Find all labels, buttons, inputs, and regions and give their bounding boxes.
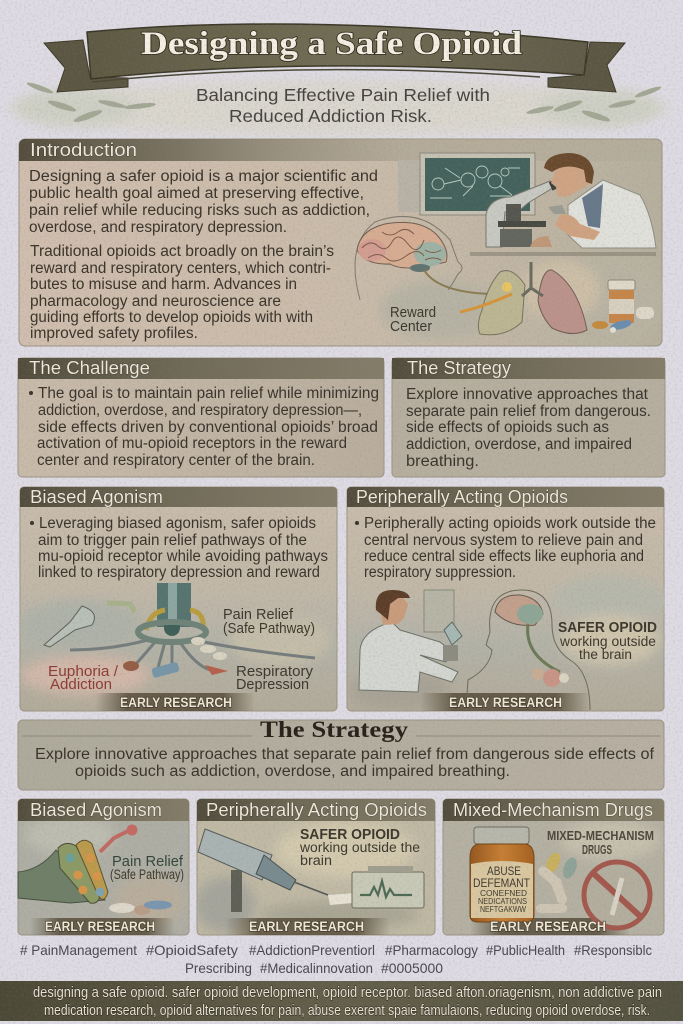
title: Designing a Safe Opioid (141, 26, 522, 62)
panel: the strategy wide (18, 717, 664, 790)
illustration: pill bottle with label: CONEFNED (480, 888, 527, 898)
icon: brain (355, 216, 510, 300)
heading: The Strategy (260, 717, 409, 742)
hashtags: #Responsiblc (574, 942, 652, 958)
illustration: hand holding capsules (18, 824, 172, 915)
hashtags: #PublicHealth (486, 942, 565, 958)
text: intro paragraph one (29, 168, 378, 236)
text: peripheral bullet (355, 515, 656, 581)
text: challenge bullet: side effects driven by conventional opioids’ broad (38, 419, 378, 436)
illustration: syringe (198, 829, 355, 912)
label: reward center: Center (390, 319, 432, 335)
label: safer opioid: brain (300, 853, 332, 868)
illustration: pill bottle with label: NEDICATIONS (478, 896, 527, 906)
subtitle: Balancing Effective Pain Relief with (196, 85, 490, 105)
hashtags: #0005000 (381, 960, 443, 976)
text: biased agonism bullet: aim to trigger pain relief pathways of the (38, 532, 307, 549)
badge: early research: EARLY RESEARCH (249, 919, 364, 934)
hashtags: #OpioidSafety (146, 942, 238, 958)
label: safer opioid: working outside (559, 634, 656, 649)
heading: Biased Agonism (30, 800, 162, 820)
text: intro paragraph one: Designing a safer opioid is a major scientific and (29, 168, 378, 185)
card: peripherally acting opioids (195, 799, 435, 935)
text: biased agonism bullet (30, 515, 328, 581)
text: strategy body: separate pain relief from dangerous. (406, 403, 651, 420)
label: respiratory depression: Respiratory (236, 664, 314, 680)
text: strategy summary: opioids such as addiction, overdose, and impaired breathing. (75, 763, 510, 780)
text: challenge bullet (29, 385, 379, 469)
text: intro paragraph two: Traditional opioids act broadly on the brain’s (30, 243, 334, 260)
text: challenge bullet: activation of mu-opioid receptors in the reward (37, 435, 347, 452)
illustration: pill bottle with label: DEFEMANT (473, 876, 531, 890)
text: strategy body: Explore innovative approaches that (406, 386, 649, 403)
illustration: receptor with pathways (44, 583, 315, 678)
panel: peripherally acting opioids (347, 487, 670, 711)
label: respiratory depression: Depression (236, 677, 309, 693)
panel: introduction (19, 139, 665, 350)
hashtags: # PainManagement (20, 942, 137, 958)
illustration: pill bottle with label: NEFTGAKWW (480, 904, 526, 914)
text: biased agonism bullet: mu-opioid receptor while avoiding pathways (38, 548, 328, 565)
illustration: monitor (352, 866, 424, 908)
text: strategy body: breathing. (406, 453, 479, 470)
label: safer opioid: the brain (579, 647, 632, 662)
label: reward center: Reward (390, 305, 436, 321)
hashtags: #Pharmacology (385, 942, 478, 958)
hashtags (20, 942, 652, 976)
heading: Mixed-Mechanism Drugs (453, 800, 653, 820)
card: mixed-mechanism drugs (443, 799, 664, 935)
text: intro paragraph two: pharmacology and neuroscience are (30, 293, 281, 310)
subtitle: Reduced Addiction Risk. (229, 106, 432, 126)
hashtags: Prescribing (185, 960, 252, 976)
label: pain relief: (Safe Pathway) (223, 621, 315, 637)
heading: introduction: Introduction (30, 140, 137, 160)
text: biased agonism bullet: linked to respiratory depression and reward (38, 564, 320, 581)
label: mixed mechanism drugs: MIXED-MECHANISM (547, 828, 654, 843)
subtitle (196, 85, 490, 126)
text: strategy body (406, 386, 651, 470)
title banner (44, 24, 625, 92)
text: peripheral bullet: respiratory suppression. (364, 564, 516, 581)
icon: chalkboard with molecule (398, 153, 535, 215)
card: biased agonism (18, 799, 189, 935)
text: peripheral bullet: central nervous system to relieve pain and (364, 532, 643, 549)
label: reward center (390, 305, 436, 335)
label: euphoria / addiction: Addiction (50, 677, 112, 693)
keyword footer (0, 981, 683, 1021)
panel: the challenge (18, 358, 384, 477)
illustration: capsules (536, 850, 579, 913)
icon: lungs (460, 262, 587, 335)
label: pain relief: Pain Relief (112, 854, 184, 870)
label: pain relief: Pain Relief (223, 607, 294, 623)
text: peripheral bullet: Peripherally acting opioids work outside the (364, 515, 656, 532)
label: pain relief (110, 854, 184, 882)
text: challenge bullet: center and respiratory center of the brain. (37, 452, 315, 469)
text: intro paragraph two: butes to misuse and harm. Advances in (30, 276, 297, 293)
badge: early research: EARLY RESEARCH (449, 695, 562, 710)
illustration: researcher with silhouette and brain (359, 590, 590, 710)
text: biased agonism bullet: Leveraging biased agonism, safer opioids (39, 515, 316, 532)
label: safer opioid (299, 827, 420, 868)
badge: early research: EARLY RESEARCH (45, 919, 155, 934)
text: intro paragraph two: reward and respiratory centers, which contri- (30, 260, 331, 277)
foliage backdrop behind the banner (10, 80, 670, 136)
text: challenge bullet: The goal is to maintain pain relief while minimizing (38, 385, 379, 402)
text: strategy summary (35, 746, 655, 780)
label: euphoria / addiction: Euphoria / (48, 664, 119, 680)
text: intro paragraph one: public health goal aimed at preserving effective, (29, 185, 364, 202)
label: safer opioid (558, 620, 657, 662)
label: pain relief: (Safe Pathway) (110, 867, 184, 882)
text: challenge bullet: addiction, overdose, and respiratory depression—, (38, 402, 362, 419)
label: safer opioid: SAFER OPIOID (300, 827, 400, 843)
label: mixed mechanism drugs: DRUGS (582, 842, 612, 857)
label: respiratory depression (236, 664, 314, 693)
illustration: pill bottle with label (470, 827, 534, 922)
heading: Biased Agonism (30, 487, 163, 507)
label: safer opioid: SAFER OPIOID (558, 620, 657, 636)
tabletop ledge (470, 252, 656, 256)
label: safer opioid: working outside the (299, 840, 420, 855)
heading: The Strategy (407, 358, 511, 378)
text: strategy body: side effects of opioids such as (406, 419, 609, 436)
heading: Peripherally Acting Opioids (356, 487, 568, 507)
icon: prohibition sign (584, 862, 650, 928)
label: mixed mechanism drugs (547, 828, 654, 857)
panel: biased agonism (20, 487, 337, 711)
text: intro paragraph two: improved safety profiles. (30, 325, 198, 342)
illustration: pill bottle with label: ABUSE (487, 864, 521, 878)
badge: early research: EARLY RESEARCH (120, 695, 232, 710)
hashtags: #AddictionPreventiorl (249, 942, 375, 958)
text: peripheral bullet: reduce central side effects like euphoria and (364, 548, 644, 565)
panel: the strategy small (392, 358, 665, 477)
badge: early research: EARLY RESEARCH (490, 919, 606, 934)
text: strategy summary: Explore innovative approaches that separate pain relief from dangerous side effects of (35, 746, 655, 763)
icon: pill bottle (592, 280, 654, 333)
text: strategy body: addiction, overdose, and impaired (406, 436, 632, 453)
text: intro paragraph one: pain relief while reducing risks such as addiction, (29, 202, 370, 219)
text: intro paragraph one: overdose, and respiratory depression. (29, 219, 287, 236)
text: intro paragraph two: guiding efforts to develop opioids with with (30, 309, 313, 326)
icon: scientist (530, 153, 656, 248)
text: intro paragraph two (30, 243, 334, 342)
heading: Peripherally Acting Opioids (206, 800, 427, 820)
label: euphoria / addiction (48, 664, 119, 693)
heading: The Challenge (29, 358, 150, 378)
label: pain relief (223, 607, 315, 637)
hashtags: #Medicalinnovation (260, 960, 373, 976)
icon: microscope (486, 178, 562, 247)
